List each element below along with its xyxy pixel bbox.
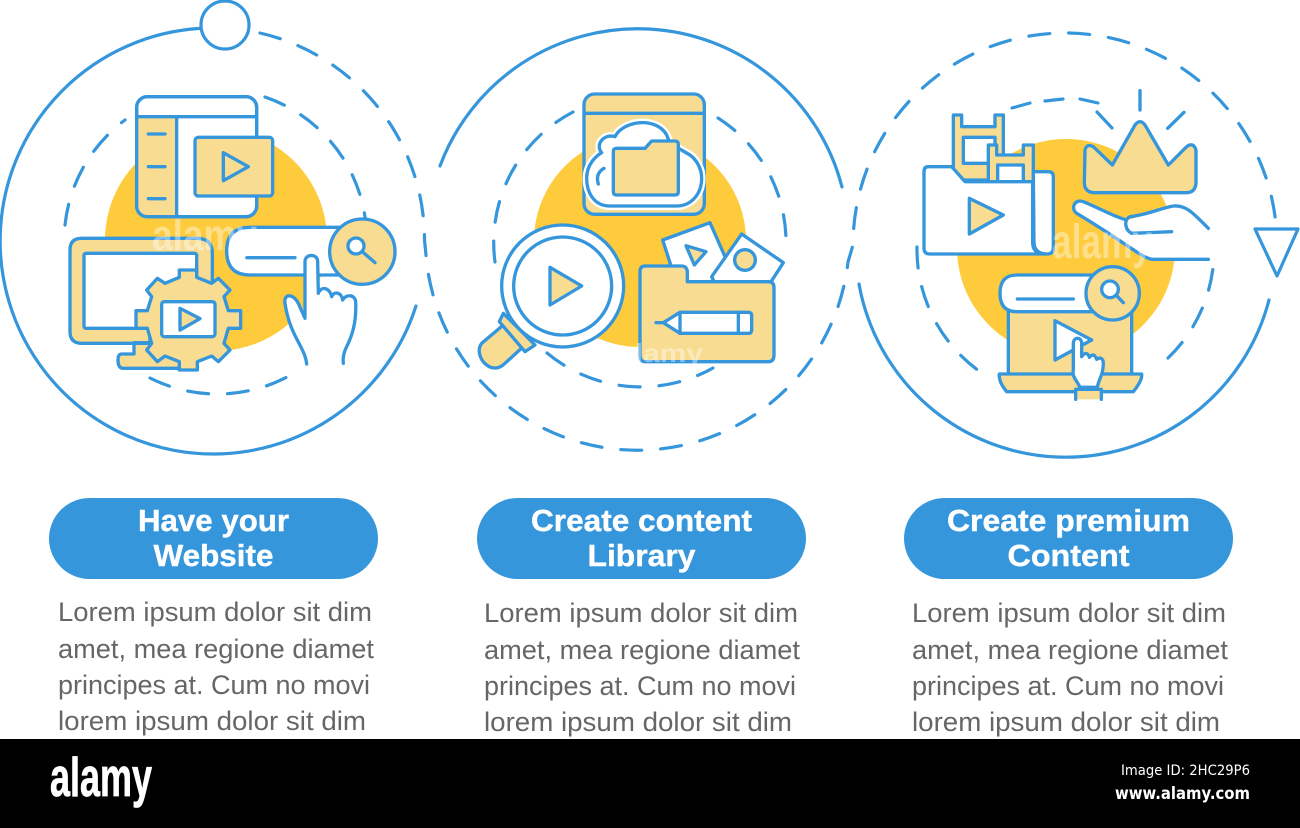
icon: photo cards in folder with pencil: [640, 223, 783, 362]
step 1 pill heading: [49, 498, 378, 579]
footer url: www.alamy.com: [1115, 784, 1250, 803]
step 2 pill heading: [477, 498, 806, 579]
step 2 body text: lorem ipsum dolor sit dim: [484, 707, 792, 737]
text: alamy: [152, 211, 257, 260]
icon group: premium content: [924, 91, 1208, 399]
icon group: content library: [479, 94, 783, 368]
step 1 body text: Lorem ipsum dolor sit dim: [58, 597, 372, 627]
step 1 pill heading: Website: [154, 538, 274, 573]
step 3 body text: amet, mea regione diamet: [912, 635, 1228, 665]
step 2 body text: amet, mea regione diamet: [484, 635, 800, 665]
footer image id: Image ID: 2HC29P6: [1121, 763, 1250, 779]
ring: step 2 solid arc: [440, 29, 842, 187]
inner dashed ring: step 1: [65, 97, 366, 394]
ring marker: small circle on step 1: [201, 1, 249, 49]
footer logo: alamy: [50, 746, 152, 808]
inner dashed ring: step 3: [1012, 99, 1112, 128]
step 3 body text: [912, 598, 1228, 737]
black footer bar: [0, 739, 1300, 828]
ring: continuous dashed line across all steps: [260, 33, 1276, 450]
ring: step 1 solid arc: [0, 28, 416, 454]
icon: open hand: [1074, 201, 1208, 259]
icon: pointing hand: [285, 255, 356, 364]
icon: browser window with video: [137, 97, 273, 217]
step 1 body text: principes at. Cum no movi: [58, 670, 370, 700]
step 2 pill heading: Create content: [531, 503, 752, 538]
icon: browser window with cloud folder: [584, 94, 704, 214]
step 2 pill heading: Library: [588, 538, 696, 573]
icon group: website tools: [70, 97, 395, 370]
step 3 pill heading: Content: [1008, 538, 1130, 573]
icon: monitor with gear: [70, 238, 241, 370]
step 2 body text: [484, 598, 800, 737]
step 3 pill heading: Create premium: [947, 503, 1190, 538]
icon: film strips in video folder: [924, 115, 1053, 254]
yellow circle: step 1: [105, 129, 327, 351]
text: alamy: [1052, 216, 1152, 269]
step 3 pill heading: [904, 498, 1233, 579]
icon: magnifier with play button: [479, 225, 624, 368]
icon: crown with rays: [1084, 91, 1196, 193]
inner dashed ring: step 2: [494, 112, 786, 387]
yellow circle: step 2: [534, 135, 746, 347]
step 3 body text: Lorem ipsum dolor sit dim: [912, 598, 1226, 628]
step 1 body text: [58, 597, 374, 736]
text: alamy: [618, 338, 704, 368]
inner dashed ring: step 3 lower arcs: [917, 247, 1213, 377]
step 1 pill heading: Have your: [138, 503, 289, 538]
step 3 body text: principes at. Cum no movi: [912, 671, 1224, 701]
icon: laptop with search bar and click: [999, 267, 1142, 399]
ring: step 3 solid arc: [859, 284, 1269, 457]
icon: search bar with magnifier: [227, 219, 395, 284]
step 1 body text: lorem ipsum dolor sit dim: [58, 706, 366, 736]
step 3 body text: lorem ipsum dolor sit dim: [912, 707, 1220, 737]
arrowhead: end of ring: [1255, 229, 1298, 276]
step 2 body text: Lorem ipsum dolor sit dim: [484, 598, 798, 628]
step 1 body text: amet, mea regione diamet: [58, 634, 374, 664]
yellow circle: step 3: [957, 139, 1175, 357]
step 2 body text: principes at. Cum no movi: [484, 671, 796, 701]
